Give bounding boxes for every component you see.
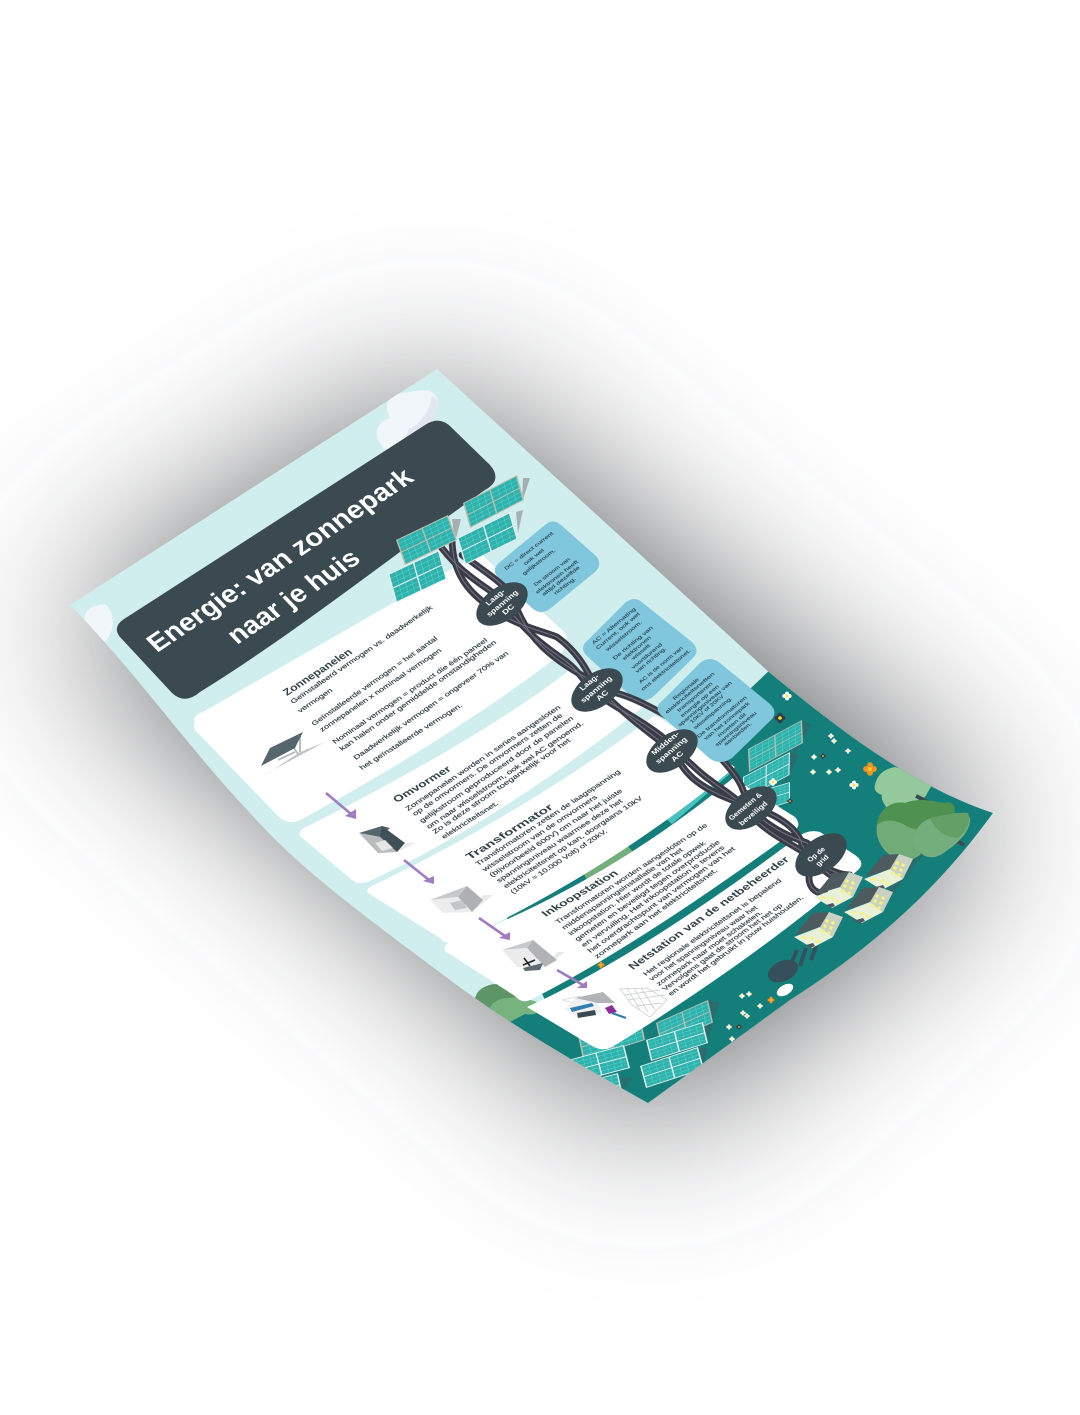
panel strip behind cards xyxy=(667,772,730,824)
voltage label: Laagspanning AC xyxy=(563,659,631,721)
bubble text: regional: De transformatoren xyxy=(696,695,749,739)
section text: Inkoopstation: inkoopstation. Hier wordt de totale opwek xyxy=(567,840,708,937)
section text: Inkoopstation: het overdrachtspunt van vermogen van het xyxy=(587,846,737,954)
card: Omvormer xyxy=(300,668,648,883)
bubble text: DC xyxy=(503,530,582,597)
houses xyxy=(794,854,913,948)
voltage label: Laagspanning AC: Laag- xyxy=(577,672,601,692)
card: Inkoopstation xyxy=(444,778,798,1001)
bubble text: regional: moeten dit xyxy=(716,712,749,738)
section text: Transformator: wisselstroom van de omvormers xyxy=(480,794,600,874)
section text: Inkoopstation: Inkoopstation xyxy=(540,869,621,919)
icon: omvormer building xyxy=(359,826,415,853)
section text: Zonnepanelen xyxy=(281,604,511,771)
section text: Netstation: zonnepark naar moet schakelen. xyxy=(655,910,765,987)
section text: Omvormer: Omvormer xyxy=(391,765,454,805)
bubble text: DC: richting. xyxy=(553,576,578,596)
background shadow xyxy=(70,389,993,1123)
tree strip green xyxy=(584,846,632,879)
bubble text: AC: ons elektriciteitsnet. xyxy=(640,649,692,692)
section text: Transformator: Transformator xyxy=(464,803,556,862)
bubble text: AC: AC = Alternating xyxy=(591,606,638,646)
voltage label: Middenspanning AC: Midden- xyxy=(649,729,682,757)
dark blob and stripes xyxy=(768,946,818,982)
icon: inkoopstation building xyxy=(502,940,565,971)
icon: transformer building xyxy=(430,886,493,913)
arrow 2 xyxy=(404,860,434,884)
bubble text: AC: elektronen xyxy=(622,635,653,662)
house shadow xyxy=(850,852,925,925)
section text: Zonnepanelen: kan halen onder gemiddelde omstandigheden xyxy=(338,639,499,752)
section text: Zonnepanelen: Zonnepanelen xyxy=(281,647,355,698)
bubble text: AC: van richting. xyxy=(634,646,668,674)
poster background xyxy=(70,369,966,1103)
section text: Netstation: Vervolgens gaat de stroom het net op xyxy=(661,903,785,992)
voltage label: Op de grid: Op de xyxy=(805,845,827,864)
section text: Transformator xyxy=(464,769,645,895)
bubble text: AC: AC is de norm van xyxy=(638,646,685,685)
section text: Omvormer: Zonnepanelen worden in series aangesloten xyxy=(404,704,563,812)
section text: Zonnepanelen: Geïnstalleerd vermogen vs. daadwerkelijk xyxy=(289,604,435,705)
section text: Inkoopstation: en vervuiling. Het inkoopstation is tevens xyxy=(580,844,727,948)
section text: Transformator: spanningsniveau waarmee deze het xyxy=(495,798,625,884)
voltage label: Op de grid: grid xyxy=(813,853,831,868)
bubble text: regional: spanningsniveau xyxy=(714,711,759,748)
bubble text: DC: altijd dezelfde xyxy=(541,565,582,597)
bubble text: AC: wisselt xyxy=(631,643,653,661)
solar panels bottom xyxy=(571,1000,720,1090)
cables xyxy=(436,538,850,893)
section text: Zonnepanelen: Nominaal vermogen = product die één paneel xyxy=(331,637,490,745)
section text: Transformator: elektriciteitsnet op kan, doorgaans 10kV xyxy=(502,795,645,890)
bubble text: regional xyxy=(664,671,759,748)
voltage label: Middenspanning AC: spanning xyxy=(653,735,689,765)
bubble text: AC: voortdurend xyxy=(630,642,664,670)
section text: Omvormer: Zo is deze stroom toegankelijk voor het xyxy=(431,738,573,835)
bubble text: regional: transporteren xyxy=(676,681,715,713)
section text: Netstation: voor het spanningsniveau waar het xyxy=(648,905,760,982)
info bubble: DC xyxy=(495,522,599,612)
section text: Omvormer: om naar wisselstroom, ook wel AC genoemd. xyxy=(425,720,586,830)
card: Transformator xyxy=(367,715,735,943)
section text: Netstation xyxy=(626,855,806,997)
title: naar je huis xyxy=(220,544,366,649)
title box xyxy=(117,421,495,699)
section text: Omvormer xyxy=(391,704,586,840)
voltage label: Laagspanning DC xyxy=(468,573,536,635)
section text: Omvormer: op de omvormers. De omvormers zetten de xyxy=(411,712,565,817)
arrow 3 xyxy=(479,918,510,940)
voltage label: Middenspanning AC: AC xyxy=(669,749,686,763)
flowers xyxy=(598,692,877,1042)
icon: netstation building and pylon xyxy=(562,988,667,1018)
section text: Netstation: Het regionale elektriciteitsnet is bepalend xyxy=(642,878,784,977)
bubble text: AC: De richting van xyxy=(612,625,655,661)
info bubble: AC xyxy=(583,599,696,701)
solar panels right xyxy=(742,720,812,814)
voltage label: Laagspanning DC: Laag- xyxy=(483,587,507,607)
bubble text: regional: wisselspanning. xyxy=(692,696,734,731)
sheep xyxy=(776,984,794,996)
card: Netstation xyxy=(527,831,861,1049)
bubble text: DC: DC = direct current xyxy=(503,530,556,572)
bubble text: regional: van het zonnepark xyxy=(703,701,752,742)
section text: Netstation: Netstation van de netbeheerder xyxy=(626,855,792,972)
bubble text: regional: Regionale xyxy=(672,677,701,702)
bubble text: regional: energie op een xyxy=(679,684,721,719)
bubble text: AC: Current, ook wel xyxy=(595,612,642,651)
trees right xyxy=(875,767,970,861)
voltage label: Laagspanning DC: DC xyxy=(500,602,516,617)
section text: Zonnepanelen: Geïnstalleerde vermogen = het aantal xyxy=(310,635,440,727)
icon: solar panel xyxy=(260,732,325,777)
voltage label: Op de grid xyxy=(787,824,855,886)
teal ground xyxy=(505,670,1000,1120)
bubble text: regional: spanningsniveau van xyxy=(677,680,734,728)
section text: Inkoopstation: gemeten en beveiligd tegen overproductie xyxy=(574,839,722,943)
section text: Inkoopstation: middenspanningsinstallatie van het xyxy=(561,847,685,931)
section text: Transformator: (bijvoorbeeld 600V) om naar het juiste xyxy=(488,788,625,878)
info bubble: regional xyxy=(658,659,774,762)
section text: Inkoopstation xyxy=(540,822,737,960)
section text: Inkoopstation: zonnepark aan het elektriciteitsnet. xyxy=(593,868,720,960)
clouds xyxy=(84,390,438,642)
bubble text: AC: wisselstroom. xyxy=(605,620,644,653)
section text: Zonnepanelen: vermogen xyxy=(296,687,335,714)
section text: Zonnepanelen: zonnepanelen x nominaal vermogen xyxy=(318,647,444,733)
bubble text: AC xyxy=(591,606,692,692)
voltage label: Gemeten en beveiligd: beveiligd xyxy=(737,800,770,827)
bubble text: DC: gelijkstroom. xyxy=(521,548,557,577)
section text: Inkoopstation: Transformatoren worden aangesloten op de xyxy=(554,822,710,925)
bubble text: DC: ook wel xyxy=(523,548,546,567)
section text: Transformator: (10kV = 10.000 Volt) of 20kV. xyxy=(509,828,610,895)
section text: Zonnepanelen: Daadwerkelijk vermogen = ongeveer 70% van xyxy=(352,650,511,761)
bubble text: regional: 10KV of 20KV xyxy=(689,693,726,725)
arrow 4 xyxy=(557,970,587,988)
solar panels top xyxy=(388,475,530,603)
title: Energie: van zonnepark xyxy=(140,462,420,657)
section text: Zonnepanelen: het geïnstalleerde vermogen. xyxy=(358,702,465,771)
section text: Omvormer: gelijkstroom geproduceerd door de panelen xyxy=(418,715,576,824)
voltage label: Gemeten en beveiligd xyxy=(717,777,785,839)
bubble text: regional: aanbieden. xyxy=(723,722,754,747)
bubble text: regional: elektriciteitsnetten xyxy=(664,671,717,715)
voltage label: Laagspanning AC: AC xyxy=(594,688,610,703)
poster sheet xyxy=(50,350,1010,1120)
voltage label: Laagspanning DC: spanning xyxy=(484,588,520,619)
arrow 1 xyxy=(326,793,356,819)
section text: Netstation: en wordt het gebruikt in jouw huishouden. xyxy=(667,895,806,997)
section text: Transformator: Transformatoren zetten de laagspanning xyxy=(474,769,623,867)
bubble text: DC: elektronen heeft xyxy=(534,559,581,595)
voltage label: Laagspanning AC: spanning xyxy=(578,674,614,705)
voltage label: Gemeten en beveiligd: Gemeten & xyxy=(726,791,764,822)
trees bottom left xyxy=(475,984,540,1022)
section text: Omvormer: elektriciteitsnet. xyxy=(440,801,501,840)
bubble text: DC: De stroom van xyxy=(533,557,572,588)
voltage label: Middenspanning AC xyxy=(638,720,706,782)
card: Zonnepanelen xyxy=(194,553,567,822)
